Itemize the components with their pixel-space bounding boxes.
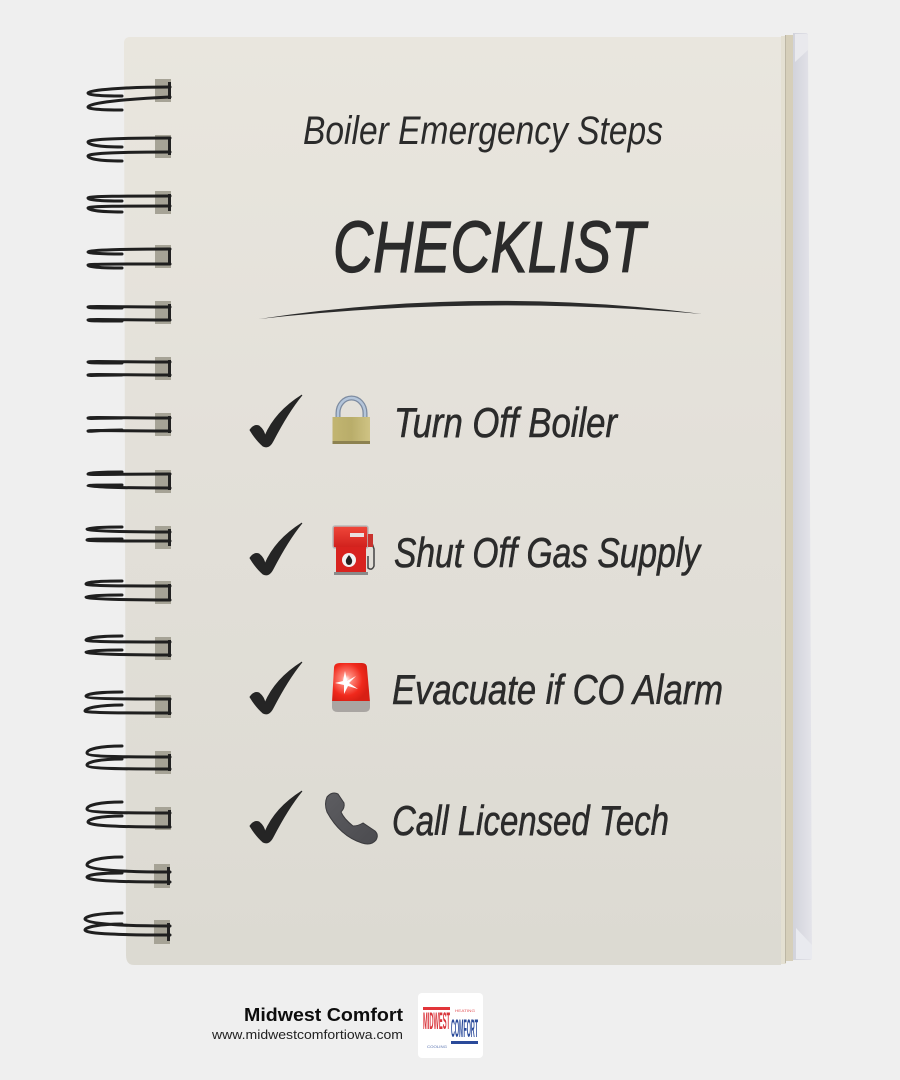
ring 13 [87, 746, 170, 769]
ring 8 [88, 472, 170, 488]
label: Evacuate if CO Alarm [392, 666, 723, 713]
label: Call Licensed Tech [392, 797, 669, 844]
footer brand [211, 993, 483, 1058]
checklist item: evacuate if co alarm [250, 662, 723, 714]
icon: padlock [332, 398, 370, 444]
title underline [259, 301, 702, 319]
checklist item: shut off gas supply [250, 523, 702, 576]
label: Turn Off Boiler [394, 399, 619, 446]
text: COMFORT [451, 1015, 478, 1043]
company name: Midwest Comfort [244, 1005, 403, 1025]
ring 16 [85, 913, 170, 935]
main page [124, 37, 781, 965]
check mark [250, 791, 302, 843]
back cover [793, 33, 812, 960]
website: www.midwestcomfortiowa.com [211, 1027, 403, 1042]
check mark [250, 662, 302, 714]
label: Shut Off Gas Supply [394, 529, 702, 576]
check mark [250, 395, 302, 447]
ring 4 [88, 249, 170, 268]
ring 15 [87, 857, 170, 882]
title: CHECKLIST [333, 208, 649, 288]
ring 1 [88, 87, 170, 110]
ring 14 [87, 802, 170, 827]
ring holes [154, 79, 171, 944]
ring 11 [86, 636, 170, 655]
ring 12 [85, 692, 170, 713]
spiral binding [85, 79, 171, 944]
logo [418, 993, 483, 1058]
ring 7 [88, 418, 170, 431]
subtitle: Boiler Emergency Steps [303, 109, 663, 153]
ring 9 [87, 527, 170, 541]
ring 3 [88, 196, 170, 212]
ring 6 [88, 362, 170, 375]
logo: MIDWEST [423, 1008, 450, 1035]
notebook [124, 33, 812, 965]
logo: COOLING [427, 1044, 447, 1049]
page stack edge [781, 35, 793, 964]
logo: HEATING [455, 1008, 475, 1013]
icon: telephone handset [326, 793, 377, 844]
checklist item: turn off boiler [250, 395, 619, 447]
checklist item: call licensed tech [250, 791, 669, 844]
icon: fuel pump [333, 526, 374, 575]
ring 2 [88, 138, 170, 161]
check mark [250, 523, 302, 575]
ring hole right edges [168, 82, 170, 941]
ring 5 [88, 307, 170, 321]
ring 10 [86, 581, 170, 600]
icon: siren [332, 663, 370, 712]
